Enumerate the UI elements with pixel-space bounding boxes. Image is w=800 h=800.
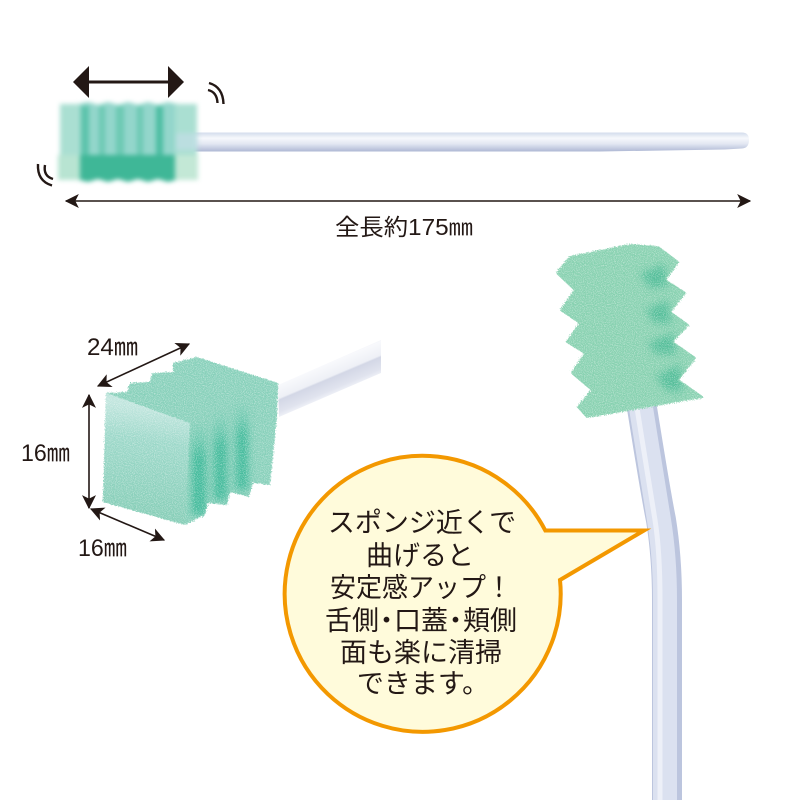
label: 24 mm: 24㎜ [87,334,138,361]
callout text: できます。 [357,669,489,699]
blurred vibrating sponge head [58,102,198,182]
icon: vibration arcs right [208,83,224,104]
bent handle [637,408,667,800]
total length label: 全長約175㎜ [335,214,473,240]
callout text [325,508,517,699]
callout text: スポンジ近くで [328,508,516,538]
speech bubble [285,456,644,732]
swab handle, horizontal [190,132,749,152]
arrow: 24 mm [98,344,189,386]
icon: vibration arcs left [38,164,53,186]
label: 16 mm depth: 16㎜ [78,535,127,562]
arrow: 16 mm height [88,395,90,508]
callout text: 面も楽に清掃 [340,638,502,668]
callout text: 舌側・口蓋・頬側 [325,606,517,636]
panel: bent swab [557,245,702,800]
sponge head, angled [103,357,278,525]
callout text: 安定感アップ！ [330,573,512,603]
panel: sponge dimensions [21,334,381,562]
total length arrow [66,200,750,202]
sponge head, profile [557,245,702,417]
panel: full-length swab [38,66,750,240]
handle, angled [278,340,381,417]
label: 16 mm height: 16㎜ [21,440,70,467]
callout [285,456,644,732]
arrow: 16 mm depth [91,509,164,540]
callout text: 曲げると [366,541,474,571]
width double arrow [73,66,184,98]
